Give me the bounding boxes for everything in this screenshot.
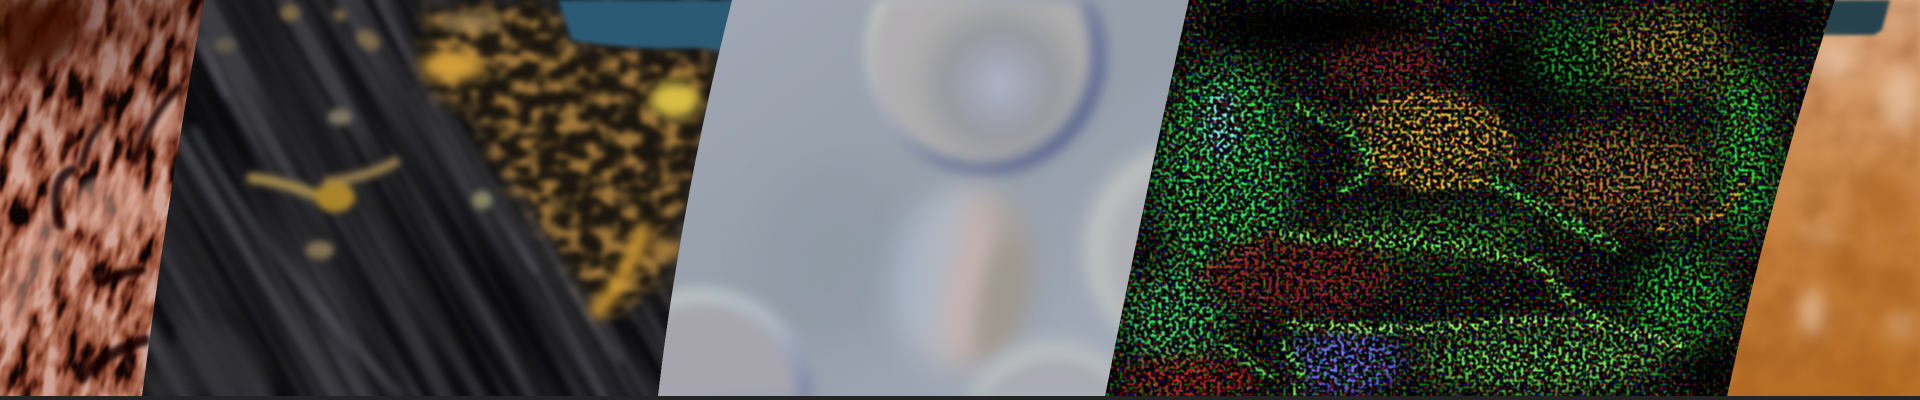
- darker mid-field shading: [760, 160, 900, 340]
- colour map revealed through fluorescence dots: [1120, 8, 1775, 398]
- panel: orange textured micrograph: [1720, 0, 1920, 397]
- bright membrane lines: [1200, 97, 1745, 397]
- mixed red-yellow cell: [1535, 127, 1715, 223]
- blood cell: right edge: [1078, 142, 1158, 333]
- upper shading: [0, 0, 205, 397]
- blood cell: top: [865, 0, 1107, 176]
- dark teal corner shape: [1820, 0, 1890, 35]
- panel: confocal fluorescence cells: [1100, 0, 1840, 398]
- dark cell interiors: [1200, 2, 1830, 396]
- gold deposit cluster: [413, 0, 716, 322]
- blue-teal corner: [558, 0, 740, 54]
- pale highlights: [1802, 44, 1918, 337]
- panel: red blood cells in differential contrast: [658, 0, 1189, 396]
- panel: dark fibres with gold deposits: [140, 0, 740, 397]
- blood cell: bottom: [969, 336, 1112, 396]
- orange shaded areas: [1823, 170, 1918, 390]
- dark upper-left patch: [0, 0, 85, 72]
- blood cell: lower left: [658, 283, 816, 396]
- pale highlight folds: [6, 96, 179, 336]
- yellow-red cell: [1358, 98, 1506, 186]
- panel: pink-brown scanning micrograph tissue: [0, 0, 205, 397]
- blue-violet cell: [1285, 326, 1405, 394]
- green membrane and cell regions: [1120, 8, 1775, 392]
- small gold flecks: [214, 5, 492, 259]
- dark red cells: [1120, 39, 1445, 398]
- bottom edge bar: [0, 396, 1920, 400]
- teal highlight: [1204, 89, 1240, 161]
- dark crevices: [56, 88, 178, 378]
- dark lower mound: [157, 332, 274, 396]
- gold bright patches: [422, 15, 699, 315]
- blood cell: centre, side view: [877, 175, 1049, 379]
- light fibre strands: [195, 0, 620, 395]
